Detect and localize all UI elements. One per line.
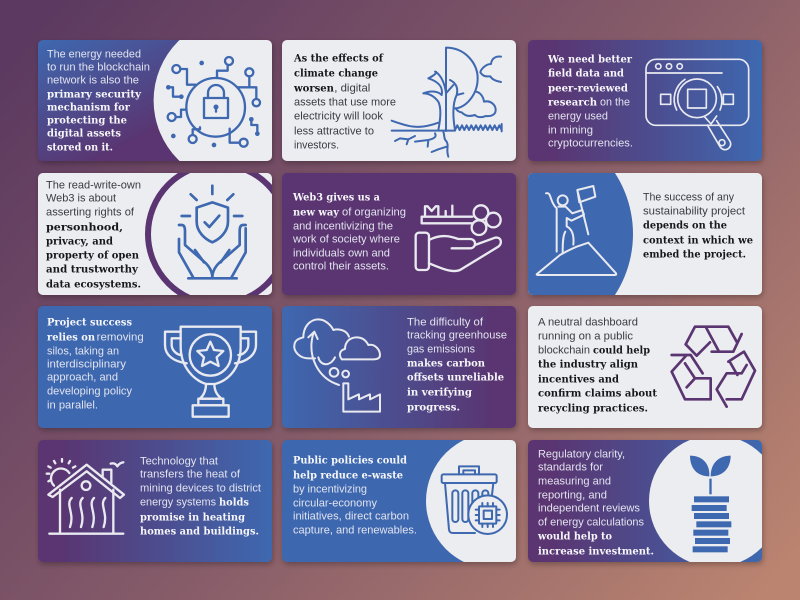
panel: climate change [282, 40, 516, 161]
text: read-write-own: data ecosystems. [46, 278, 141, 290]
panel: project success [38, 306, 272, 428]
text: heat reuse [140, 456, 261, 538]
text: climate change [293, 52, 396, 152]
text: greenhouse gas tracking: in verifying [407, 386, 473, 398]
text: field data: energy used [548, 110, 608, 122]
text: read-write-own: Web3 is about [46, 192, 116, 204]
text: climate change: , digital [334, 82, 370, 94]
text: climate change: assets that use more [294, 96, 396, 108]
text: recycling dashboard: confirm claims about [538, 388, 657, 400]
text: read-write-own [46, 180, 141, 290]
text: regulatory clarity: independent reviews [538, 502, 641, 514]
text: regulatory clarity: measuring and [538, 476, 611, 488]
text: regulatory clarity [537, 448, 654, 558]
text: sustainability context: sustainability project [643, 206, 745, 218]
text: regulatory clarity: reporting, and [538, 490, 607, 502]
icon: circuit padlock [166, 57, 260, 147]
text: security mechanism: to run the blockchain [47, 62, 150, 74]
icon: heated house [47, 459, 124, 534]
text: regulatory clarity: of energy calculations [538, 516, 644, 528]
text: regulatory clarity: Regulatory clarity, [538, 448, 625, 460]
text: new way of organizing [292, 192, 406, 272]
text: field data: in mining [548, 124, 593, 136]
icon: seedling on coin stack [690, 456, 731, 552]
text: recycling dashboard: recycling practices. [538, 402, 648, 414]
icon: tree, moon and clouds [392, 48, 502, 157]
text: climate change: worsen [293, 82, 334, 94]
panel: new way of organizing [282, 173, 516, 295]
text: field data: field data and [548, 68, 625, 80]
panel: sustainability context [527, 173, 766, 300]
text: climate change: electricity will look [294, 110, 383, 122]
text: security mechanism: The energy needed [47, 48, 141, 60]
text: read-write-own: property of open [46, 250, 139, 262]
text: field data: on the [600, 96, 630, 108]
icon: clouds and factory [294, 319, 380, 412]
text: read-write-own: privacy, and [46, 236, 114, 248]
panel: heat reuse [38, 440, 272, 562]
text: recycling dashboard: A neutral dashboard [538, 316, 638, 328]
text: heat reuse: holds [219, 496, 249, 508]
text: greenhouse gas tracking: gas emissions [407, 344, 475, 356]
text: project success: removing [97, 332, 144, 344]
text: new way of organizing: and incentivizing the [293, 220, 393, 232]
text: greenhouse gas tracking [407, 316, 507, 414]
panel: field data [528, 40, 762, 161]
text: recycling dashboard: could help [593, 344, 650, 356]
text: new way of organizing: Web3 gives us a [292, 192, 380, 204]
text: e-waste policy: initiatives, direct carbon [293, 510, 409, 522]
text: security mechanism: mechanism for [47, 102, 130, 114]
panel: regulatory clarity [528, 435, 781, 567]
text: heat reuse: transfers the heat of [140, 468, 241, 480]
text: field data: cryptocurrencies. [548, 138, 633, 150]
text: sustainability context [643, 192, 753, 260]
text: climate change: investors. [294, 140, 339, 152]
text: project success: approach, and [47, 372, 118, 384]
text: security mechanism: protecting the [47, 114, 127, 126]
text: e-waste policy: Public policies could [293, 454, 408, 466]
text: e-waste policy: circular-economy [293, 498, 377, 510]
text: heat reuse: promise in heating [140, 512, 246, 524]
text: recycling dashboard: the industry align [538, 358, 638, 370]
text: climate change: climate change [294, 68, 378, 80]
text: heat reuse: Technology that [140, 456, 218, 468]
text: greenhouse gas tracking: The difficulty of [407, 316, 484, 328]
text: project success [47, 316, 144, 412]
text: read-write-own: personhood, [46, 222, 123, 234]
panel: greenhouse gas tracking [282, 306, 516, 428]
icon: climber with flag [537, 186, 616, 275]
text: read-write-own: and trustworthy [46, 264, 139, 276]
panel: security mechanism [38, 40, 275, 166]
text: field data: research [548, 96, 597, 108]
text: field data [547, 54, 633, 150]
text: security mechanism: network is also the [47, 74, 139, 86]
icon: shield in hands [179, 186, 246, 278]
text: project success: relies on [47, 332, 95, 344]
text: greenhouse gas tracking: progress. [407, 402, 460, 414]
panel: recycling dashboard [528, 306, 762, 428]
text: security mechanism [47, 48, 150, 154]
text: climate change: As the effects of [293, 52, 384, 64]
text: climate change: less attractive to [294, 126, 374, 138]
text: sustainability context: depends on the [643, 220, 727, 232]
text: project success: interdisciplinary [47, 358, 127, 370]
text: greenhouse gas tracking: makes carbon [407, 358, 485, 370]
text: project success: in parallel. [47, 400, 98, 412]
text: heat reuse: energy systems [140, 496, 216, 508]
icon: trophy [165, 327, 256, 417]
icon: recycling arrows [672, 327, 755, 407]
text: security mechanism: stored on it. [47, 142, 113, 154]
text: sustainability context: The success of any [643, 192, 734, 204]
text: project success: developing policy [47, 386, 133, 398]
text: security mechanism: primary security [47, 88, 142, 100]
text: sustainability context: embed the project. [643, 248, 746, 260]
text: regulatory clarity: increase investment. [538, 546, 654, 558]
text: regulatory clarity: would help to [537, 530, 612, 542]
icon: browser with magnifier [646, 59, 749, 150]
text: project success: silos, taking an [47, 346, 119, 358]
text: recycling dashboard [538, 316, 657, 414]
text: e-waste policy: help reduce e-waste [293, 470, 403, 482]
text: greenhouse gas tracking: tracking greenhouse [407, 330, 507, 342]
text: e-waste policy [293, 454, 417, 536]
icon: key over hand [416, 205, 501, 271]
text: new way of organizing: work of society where [292, 234, 400, 246]
panel: e-waste policy [281, 440, 520, 567]
icon: trash bin with chip [442, 466, 507, 534]
text: read-write-own: The read-write-own [46, 180, 141, 192]
text: greenhouse gas tracking: offsets unreliable [407, 372, 504, 384]
text: new way of organizing: new way [293, 206, 340, 218]
text: read-write-own: asserting rights of [46, 206, 135, 218]
text: heat reuse: mining devices to district [140, 482, 261, 494]
text: recycling dashboard: blockchain [538, 344, 590, 356]
text: heat reuse: homes and buildings. [140, 526, 259, 538]
text: recycling dashboard: incentives and [538, 374, 620, 386]
text: new way of organizing: of organizing [342, 206, 406, 218]
text: new way of organizing: individuals own and [293, 248, 390, 260]
text: sustainability context: context in which we [643, 234, 753, 246]
text: security mechanism: digital assets [47, 128, 121, 140]
text: project success: Project success [47, 316, 132, 328]
text: regulatory clarity: standards for [538, 462, 603, 474]
text: recycling dashboard: running on a public [538, 330, 633, 342]
text: new way of organizing: control their assets. [293, 260, 389, 272]
text: e-waste policy: capture, and renewables. [293, 524, 417, 536]
text: field data: We need better [547, 54, 632, 66]
text: e-waste policy: by incentivizing [293, 484, 367, 496]
text: field data: peer-reviewed [548, 82, 629, 94]
panel: read-write-own [38, 173, 275, 300]
